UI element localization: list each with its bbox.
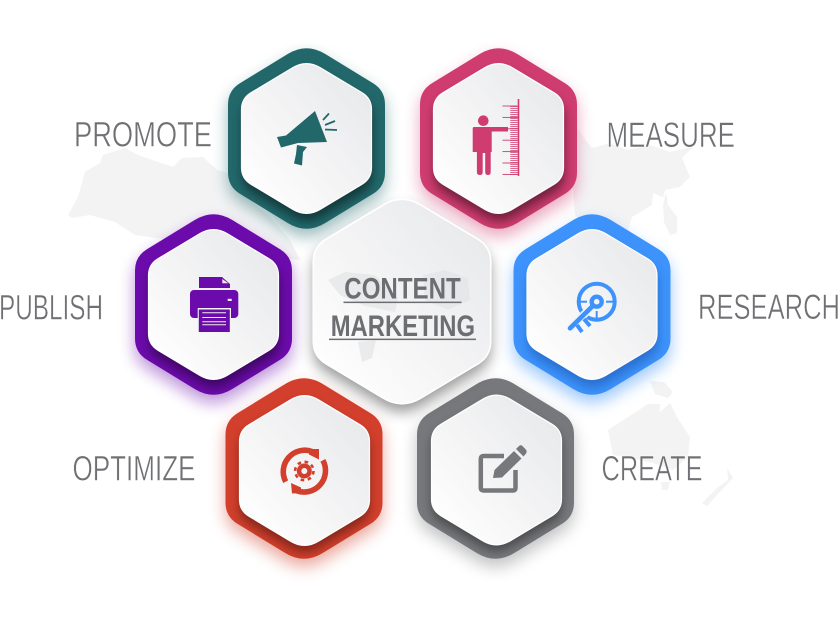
label: create: CREATE — [602, 448, 702, 488]
hexagon: create — [417, 378, 574, 567]
icon: person with ruler — [473, 99, 519, 176]
label: optimize: OPTIMIZE — [72, 448, 196, 488]
hexagon: research — [514, 214, 670, 403]
hexagon: measure — [420, 48, 577, 237]
title: marketing: MARKETING — [331, 310, 475, 343]
label: measure: MEASURE — [606, 115, 735, 155]
hexagon: publish — [135, 214, 292, 403]
icon: printer — [190, 277, 238, 332]
icon: gear with cycle arrows — [283, 449, 325, 494]
hexagon: optimize — [226, 378, 382, 567]
central hexagon: content marketing — [313, 199, 491, 412]
label: publish: PUBLISH — [0, 288, 103, 328]
faint map inside centre hexagon — [328, 270, 470, 362]
icon: pencil on square — [481, 445, 527, 490]
hexagon: promote — [228, 48, 385, 237]
label: promote: PROMOTE — [74, 114, 212, 154]
title: content: CONTENT — [344, 272, 461, 305]
world map background — [68, 128, 733, 506]
icon: megaphone — [277, 111, 337, 166]
icon: target key — [570, 284, 615, 332]
